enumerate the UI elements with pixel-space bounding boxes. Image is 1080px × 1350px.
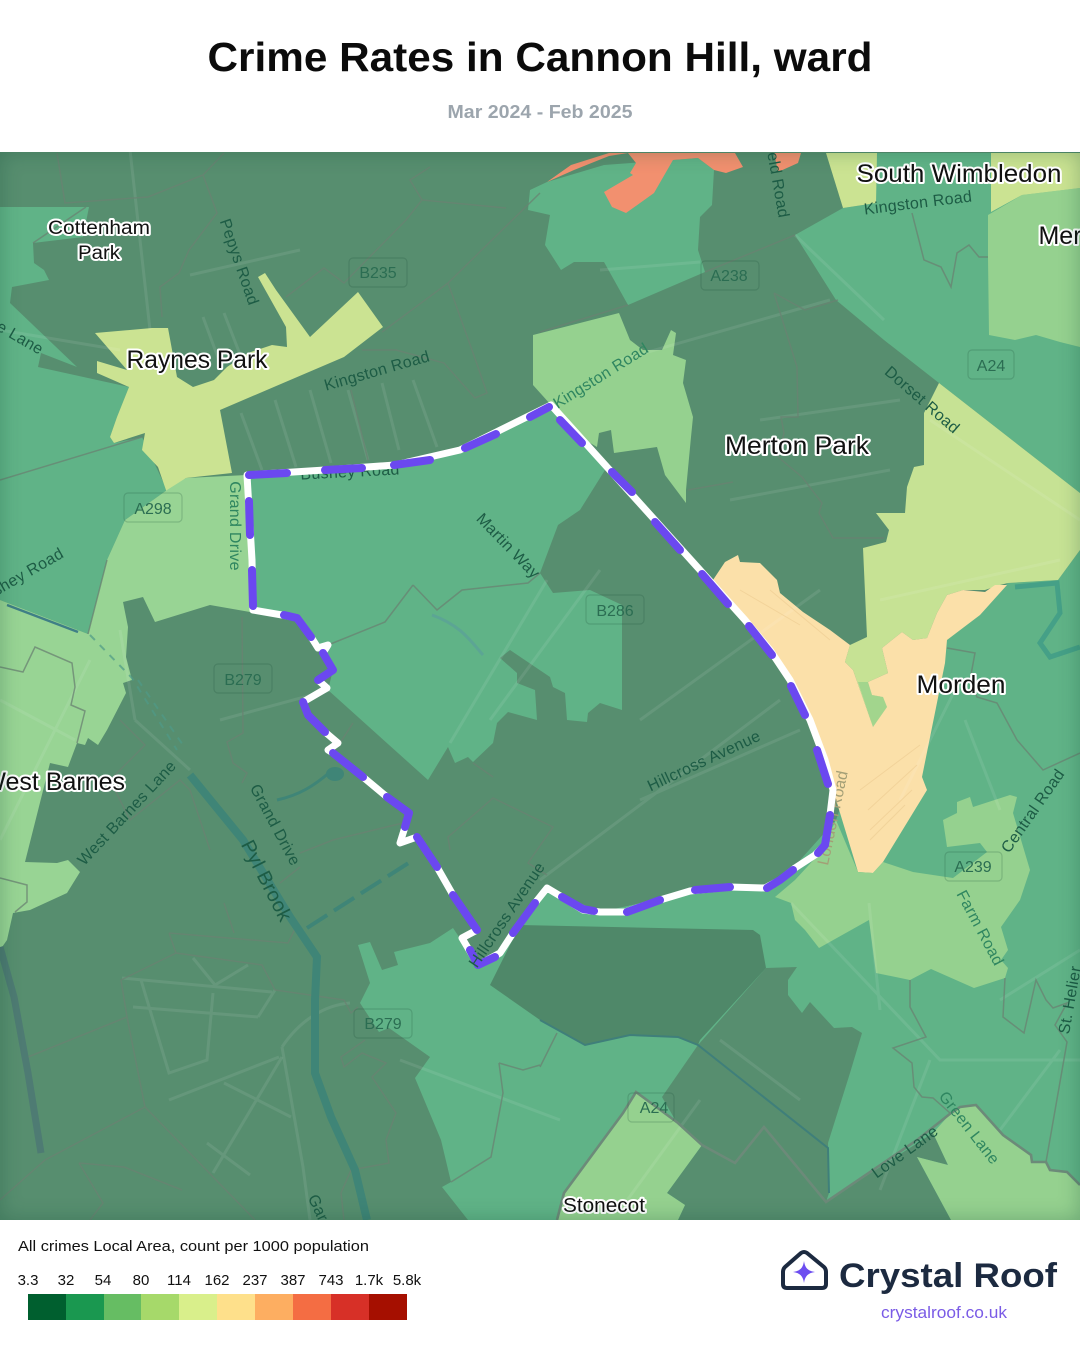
region: West Barnes and Grand Drive light green <box>0 475 250 950</box>
region: dark south strip <box>662 967 951 1220</box>
place: South Wimbledon: South Wimbledon <box>856 160 1062 188</box>
region: Raynes Park yellow-green <box>95 273 383 493</box>
peach rail yard detail <box>740 590 920 840</box>
place: Raynes Park: Raynes Park <box>126 346 268 374</box>
legend <box>18 1272 422 1320</box>
pond and stream <box>277 772 330 800</box>
shield: B279 south: B279 <box>364 1016 402 1033</box>
website url: crystalroof.co.uk <box>881 1303 1008 1322</box>
place: Cottenham Park second line: Park <box>78 243 121 264</box>
region: south-east light green <box>917 1105 1080 1220</box>
shield: A238 <box>701 261 759 290</box>
shield: B235 <box>349 258 407 287</box>
region: north-west mid green <box>0 207 167 634</box>
river: Beverley stream <box>7 605 78 632</box>
shield: A238: A238 <box>710 268 748 285</box>
dashed culvert <box>307 862 410 928</box>
purple dashes west <box>249 501 477 930</box>
place labels <box>0 160 1080 1217</box>
street: Grand Drive south: Grand Drive <box>246 782 303 869</box>
pond <box>326 767 344 781</box>
logo: Crystal Roof <box>781 1250 1058 1322</box>
road network overlay <box>0 150 1080 1220</box>
shield: A24 north <box>968 350 1014 379</box>
legend tick labels <box>18 1272 422 1289</box>
region: south and east mid green <box>358 550 1080 1220</box>
title: Crime Rates in Cannon Hill, ward <box>208 34 872 80</box>
street: Bushey Road: Bushey Road <box>300 461 400 484</box>
region: Morden town centre peach <box>713 555 1007 873</box>
street: Love Lane: Love Lane <box>869 1123 942 1182</box>
region: Farm Road light green <box>775 795 1030 988</box>
icon: house with star <box>783 1252 826 1288</box>
river label: Pyl Brook: Pyl Brook <box>236 837 296 926</box>
legend tick labels: 162 <box>204 1272 230 1289</box>
shield: A24 south <box>628 1093 674 1122</box>
street: West Barnes Lane: West Barnes Lane <box>75 758 180 869</box>
street: London Road: London Road <box>815 769 852 867</box>
region: Kingston Road light green <box>533 313 693 503</box>
legend colour bar <box>28 1294 407 1320</box>
region: top salmon sliver <box>774 153 801 172</box>
shield: A239: A239 <box>954 859 992 876</box>
place: Stonecot: Stonecot <box>563 1195 645 1217</box>
shield: B279 west <box>214 664 272 693</box>
street labels <box>0 151 1080 1225</box>
street: Kingston Road west: Kingston Road <box>322 348 432 395</box>
region: Cannon Hill ward interior mid green <box>245 405 622 780</box>
street: Field Road: eld Road <box>763 152 792 219</box>
purple dashes east <box>560 420 828 784</box>
water courses <box>0 583 1080 1220</box>
street: Central Road: Central Road <box>998 766 1068 856</box>
railway dashes <box>90 635 183 750</box>
region: salmon high-crime area <box>547 153 743 213</box>
south stream <box>540 1020 829 1193</box>
shield: A298: A298 <box>134 501 172 518</box>
east wetland <box>1015 583 1080 657</box>
street: Hillcross Avenue east: Hillcross Avenue <box>645 728 763 795</box>
shield: B286: B286 <box>596 603 634 620</box>
shield: B286 <box>586 595 644 624</box>
shield: A24 north: A24 <box>977 358 1005 375</box>
shield: B279 south <box>354 1009 412 1038</box>
shield: B235: B235 <box>359 265 397 282</box>
white casing <box>247 405 833 965</box>
region: Merton yellow-green <box>845 383 1080 727</box>
thick grey borough border <box>557 1092 1080 1220</box>
region: top right yellow-green <box>991 153 1080 212</box>
street: Green Lane: Green Lane <box>935 1089 1002 1168</box>
legend tick labels: 3.3 <box>18 1272 38 1289</box>
road shields <box>124 258 1014 1122</box>
subtitle: date range: Mar 2024 - Feb 2025 <box>448 102 632 122</box>
region: far east light green <box>988 188 1080 347</box>
region: north-centre mid green <box>528 158 714 305</box>
street: Farm Road: Farm Road <box>953 888 1006 969</box>
legend tick labels: 743 <box>318 1272 344 1289</box>
region: Stonecot light green <box>557 1092 702 1220</box>
shield: A239 <box>945 852 1002 881</box>
region: north-east mid green <box>795 153 1080 493</box>
shield: A24 south: A24 <box>640 1100 668 1117</box>
legend tick labels: 54 <box>95 1272 111 1289</box>
street: Hillcross Avenue west: Hillcross Avenue <box>466 860 549 971</box>
legend tick labels: 1.7k <box>355 1272 384 1289</box>
street: Pepys Road: Pepys Road <box>216 217 261 308</box>
stream inside ward <box>432 615 483 655</box>
river: west stream <box>0 947 41 1153</box>
legend title: All crimes Local Area, count per 1000 population <box>18 1238 369 1255</box>
wordmark: Crystal Roof <box>839 1257 1058 1295</box>
place: Merton Park: Merton Park <box>725 432 870 460</box>
legend tick labels: 32 <box>58 1272 74 1289</box>
street: Dorset Road: Dorset Road <box>881 363 962 437</box>
street: Grand Drive north: Grand Drive <box>226 481 243 571</box>
legend tick labels: 80 <box>133 1272 149 1289</box>
place: Morden: Morden <box>916 671 1006 699</box>
street: Kingston Road east: Kingston Road <box>551 340 652 412</box>
river: Pyl Brook <box>190 775 367 1220</box>
place: Cottenham Park: Cottenham <box>48 218 150 239</box>
legend tick labels: 387 <box>280 1272 306 1289</box>
shield: B279 west: B279 <box>224 672 262 689</box>
ward boundary: Cannon Hill <box>247 405 833 965</box>
shield: A298 <box>124 493 182 522</box>
region: Morden wedge light green <box>858 682 887 727</box>
choropleth map <box>0 152 1080 1220</box>
purple dashes north <box>249 407 549 475</box>
legend tick labels: 5.8k <box>393 1272 422 1289</box>
purple dashes south <box>470 815 830 965</box>
region: South Wimbledon yellow-green <box>826 153 877 208</box>
street: Kingston Road north-east: Kingston Road <box>863 188 973 219</box>
base area: low crime dark green <box>0 152 1080 1220</box>
ward and borough boundary lines <box>0 153 1080 1220</box>
legend tick labels: 114 <box>167 1272 191 1289</box>
legend tick labels: 237 <box>242 1272 268 1289</box>
region: dark blob south of ward <box>490 925 766 1045</box>
street: Martin Way: Martin Way <box>473 510 543 582</box>
